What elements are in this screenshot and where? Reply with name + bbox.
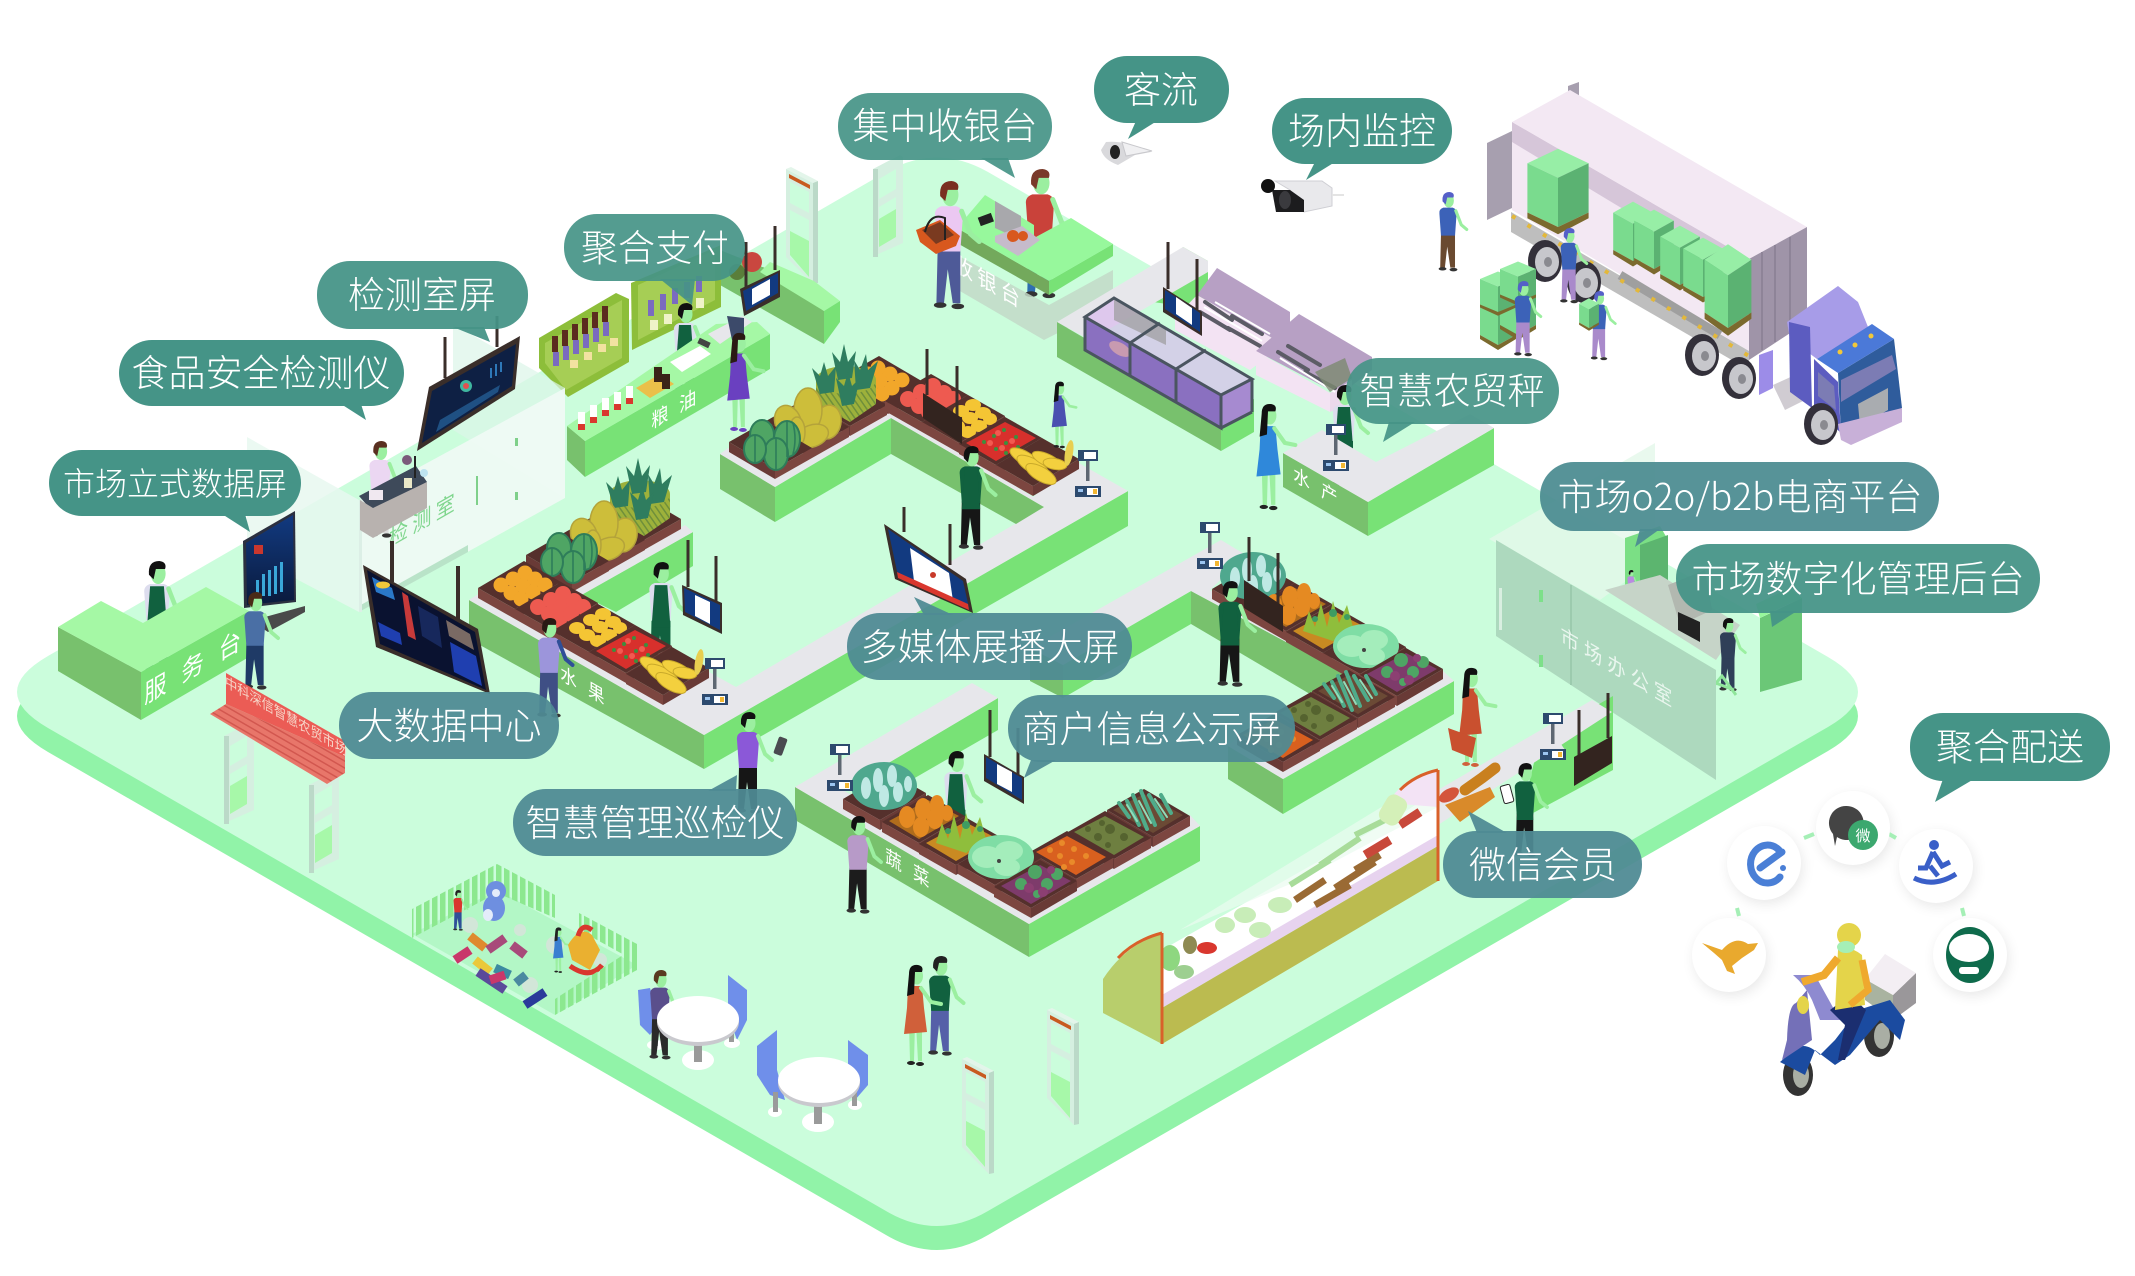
person: couple, woman (904, 965, 941, 1066)
callout: lab screen (317, 261, 528, 342)
person: couple, man (928, 956, 964, 1056)
text: cashier label: 收银台 (954, 250, 1024, 315)
person: meat counter clerk with phone (1500, 763, 1547, 857)
callout: merchant information (1008, 695, 1295, 778)
person: blue dress shopper (1052, 382, 1076, 448)
icon: scale vegetable upper (1197, 522, 1223, 569)
icon: cargo boxes in truck (1527, 149, 1751, 336)
panel: dining table 2 (757, 1030, 868, 1132)
icon: ham stand (1436, 768, 1495, 822)
icon: smart scale (1323, 424, 1349, 471)
callout: e-commerce platform: 市场o2o/b2b电商平台 (1558, 467, 1922, 521)
person: worker with scanner (1439, 192, 1467, 271)
panel: children's play area (412, 864, 637, 1015)
person: shopper at vegetables (846, 816, 881, 914)
callout: big data center (339, 692, 559, 759)
callout: management backend (1676, 544, 2040, 627)
sign: hanging board fruit upper (923, 349, 962, 444)
icon: runner delivery circle (1899, 829, 1973, 903)
person: woman with basket (1448, 668, 1495, 767)
panel: produce stall: fruit lower (469, 458, 1128, 769)
icon: payment terminal (697, 316, 752, 348)
panel: grain and oil shelves (539, 245, 721, 397)
panel: produce stall: vegetable upper (1030, 540, 1454, 814)
callout: customer flow: 客流 (1124, 70, 1198, 111)
panel: cashier counter (953, 195, 1113, 340)
callout: food safety tester (119, 340, 404, 420)
person: cashier (1025, 169, 1070, 298)
icon: WeChat delivery circle: 微 (1855, 828, 1871, 845)
callout: inspection device (513, 775, 797, 856)
icon: rocking horse (568, 927, 602, 973)
callout: aggregated delivery (1910, 713, 2110, 802)
text: grain and oil label: 粮油 (651, 379, 707, 434)
person: office man (1719, 618, 1745, 691)
person: grain stall clerk (673, 303, 709, 405)
text: market name sign: 中科深信智慧农贸市场 (225, 673, 347, 759)
callout: inspection device: 智慧管理巡检仪 (526, 803, 784, 844)
person: long blue dress shopper (1256, 404, 1295, 510)
screen: lab monitor (417, 316, 520, 451)
panel: dining table 1 (638, 970, 747, 1070)
callout: aggregated payment: 聚合支付 (581, 228, 729, 269)
callout: smart scale (1346, 358, 1559, 442)
person: shopper at fruit stall (537, 618, 573, 718)
callout: smart scale: 智慧农贸秤 (1360, 371, 1544, 412)
screen: aquatic small (1163, 242, 1202, 336)
callout: lab screen: 检测室屏 (348, 275, 496, 316)
callout: big data center: 大数据中心 (356, 706, 542, 747)
icon: dome camera (1101, 142, 1152, 165)
callout: standing data screen: 市场立式数据屏 (63, 466, 287, 502)
callout: central cashier (838, 93, 1052, 178)
panel: produce stall: fruit upper (720, 344, 1079, 524)
icon: delivery scooter and rider (1780, 923, 1916, 1096)
icon: scale vegetable lower (827, 744, 853, 791)
person: worker near trailer (1560, 228, 1587, 303)
icon: scale fruit upper (1075, 450, 1101, 497)
person: fruit stall clerk (648, 562, 686, 669)
icon: building blocks (455, 936, 545, 1005)
callout: aggregated delivery: 聚合配送 (1936, 727, 2084, 768)
icon: truck wheels (1528, 240, 1756, 399)
floor platform (17, 158, 1858, 1250)
person: aquatic stall clerk (1332, 385, 1368, 487)
callout: customer flow (1094, 56, 1229, 139)
screen: big data center (363, 541, 490, 694)
person: lab technician (369, 441, 403, 538)
person: seated man (649, 970, 681, 1059)
panel: aquatic upper stall (1057, 247, 1372, 451)
panel: office (1489, 443, 1802, 780)
person: worker carrying box (1579, 291, 1615, 360)
callout: WeChat member: 微信会员 (1469, 845, 1617, 886)
icon: scale at fruit stall (702, 658, 728, 705)
icon: dog delivery circle (1933, 918, 2007, 992)
icon: cash register (995, 201, 1040, 256)
group: vegetable crates (843, 762, 1190, 918)
person: worker at pallet (1514, 281, 1541, 356)
text: vegetable label: 蔬菜 (885, 845, 941, 899)
person: office woman (1627, 570, 1639, 603)
text: office label: 市场办公室 (1561, 624, 1677, 715)
callout: multimedia big screen: 多媒体展播大屏 (860, 627, 1120, 668)
text: service desk label: 服务台 (144, 616, 256, 710)
screen: fruit stall small (682, 540, 722, 634)
callout: management backend: 市场数字化管理后台 (1692, 559, 2024, 600)
person: purple dress shopper (727, 333, 763, 432)
icon: pallet stack (1480, 262, 1536, 350)
panel: cashier gates (786, 155, 903, 284)
person: inspector with handheld device (736, 712, 788, 814)
panel: meat counter (1436, 693, 1613, 825)
screen: merchant info (984, 710, 1024, 804)
panel: entrance arch (210, 673, 347, 873)
callout: aggregated payment (564, 214, 745, 305)
person: service clerk (143, 561, 185, 678)
icon: office cabinets (1625, 526, 1802, 692)
sign: hanging board meat (1574, 693, 1612, 786)
icon: WeChat delivery circle (1816, 791, 1890, 865)
text: fruit label: 水果 (560, 662, 616, 716)
sign: hanging board vegetable (1244, 537, 1283, 632)
callout: central cashier: 集中收银台 (852, 106, 1038, 147)
person: shopper paying (934, 181, 979, 309)
panel: produce stall: vegetable lower (795, 683, 1200, 957)
screen: multimedia display (884, 507, 973, 613)
callout: standing data screen (49, 450, 301, 532)
callout: multimedia big screen (847, 597, 1132, 680)
panel: service desk (58, 561, 256, 720)
icon: kangaroo delivery circle (1692, 918, 1766, 992)
screen: standing data display (243, 511, 305, 632)
person: vegetable stall clerk (1218, 581, 1255, 687)
panel: grain and oil counter (567, 322, 770, 477)
icon: bullet camera (1261, 179, 1344, 212)
icon: shopping basket (916, 213, 994, 254)
icon: toy bear (483, 881, 506, 921)
icon: fish box 1 (1175, 268, 1290, 370)
callout: surveillance: 场内监控 (1288, 111, 1436, 152)
callout: WeChat member (1443, 811, 1642, 898)
text: aquatic label: 水产 (1293, 463, 1349, 517)
icon: fish tanks (1085, 298, 1252, 428)
person: child in red (453, 890, 468, 931)
callout: surveillance (1272, 98, 1452, 180)
panel: aquatic counter (1283, 414, 1494, 536)
person: child with horse (553, 927, 570, 973)
icon: office desk and monitor (1605, 570, 1740, 660)
callout: merchant information: 商户信息公示屏 (1022, 709, 1282, 750)
person: vegetable lower clerk (943, 751, 981, 858)
screen: aggregated payment (740, 226, 780, 316)
panel: lab room (247, 324, 565, 612)
icon: office chair (1706, 676, 1736, 695)
panel: aggregated delivery platforms (1692, 791, 2008, 1096)
callout: e-commerce platform (1540, 462, 1939, 547)
icon: e delivery circle (1727, 826, 1801, 900)
person: clerk with black trousers (959, 446, 995, 550)
callout: food safety tester: 食品安全检测仪 (132, 353, 390, 394)
text: lab label: 检测室 (389, 487, 459, 552)
panel: green booth behind grain stall (720, 250, 840, 344)
icon: lab bench (359, 455, 428, 538)
panel: delivery truck (1439, 82, 1902, 445)
icon: fish box 2 (1256, 314, 1372, 412)
icon: truck cab (1759, 286, 1902, 445)
icon: scale meat (1540, 713, 1566, 760)
person: woman at standing display (243, 592, 278, 690)
panel: exit gates (962, 1008, 1079, 1174)
panel: deli display counter (1103, 770, 1438, 1044)
icon: deli food row (1160, 792, 1420, 979)
